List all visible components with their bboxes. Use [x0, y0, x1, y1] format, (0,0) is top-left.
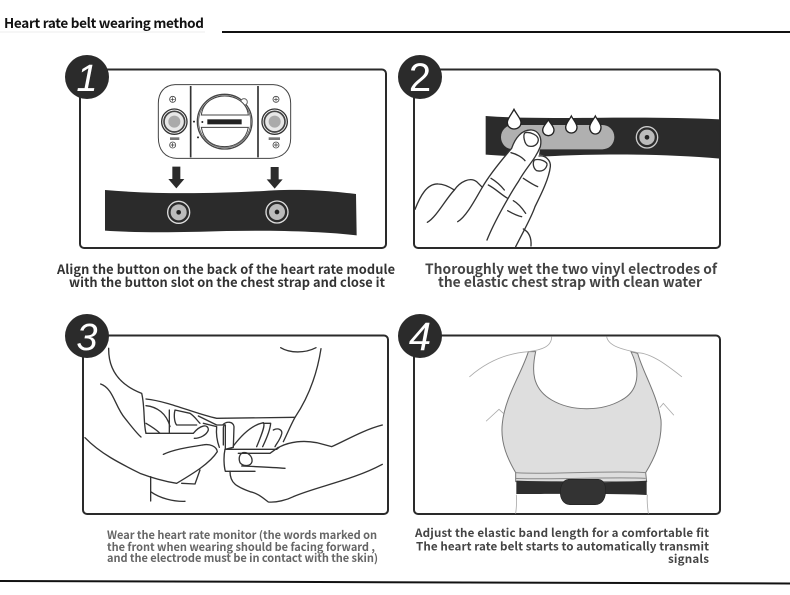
chest strap	[516, 481, 647, 495]
arrow: left down	[168, 167, 184, 188]
icon: hand with fingers	[415, 130, 550, 247]
illustration: torso with chest strap	[470, 337, 682, 513]
chest strap with two snap buttons	[105, 190, 357, 235]
caption: step 4: signals	[668, 551, 709, 567]
title: Heart rate belt wearing method	[4, 12, 204, 32]
step badge 3: 3	[76, 317, 98, 359]
caption: step 4	[414, 525, 709, 567]
icon: water drops	[507, 109, 601, 136]
step badge 3	[65, 314, 109, 359]
caption: step 4: Adjust the elastic band length for a comfortable fit	[414, 525, 709, 541]
step badge 2	[398, 55, 442, 100]
chest strap with electrode	[486, 116, 720, 159]
caption: step 1	[56, 259, 395, 291]
caption: step 1: with the button slot on the chest strap and close it	[69, 272, 386, 291]
caption: step 2: Thoroughly wet the two vinyl electrodes of	[425, 258, 718, 278]
caption: step 2: the elastic chest strap with clean water	[438, 271, 703, 291]
caption: step 3	[107, 527, 378, 566]
panel: step 2 wet electrodes	[398, 55, 720, 248]
caption: step 3: the front when wearing should be facing forward ,	[107, 539, 375, 555]
caption: step 3: and the electrode must be in contact with the skin)	[107, 550, 378, 566]
step badge 2: 2	[409, 56, 431, 100]
icon: heart rate module back	[158, 85, 291, 158]
step badge 4: 4	[409, 315, 431, 359]
caption: step 2	[425, 258, 718, 291]
panel: step 1 attach module	[65, 55, 386, 248]
arrow: right down	[267, 167, 283, 189]
step badge 1	[65, 55, 109, 100]
caption: step 1: Align the button on the back of the heart rate module	[56, 259, 395, 278]
caption: step 4: The heart rate belt starts to automatically transmit	[416, 538, 709, 554]
heart rate module	[560, 479, 606, 505]
step badge 1: 1	[76, 58, 98, 100]
illustration: hands fastening strap	[85, 348, 382, 502]
step badge 4	[398, 314, 442, 359]
panel: step 3 wear the monitor	[65, 314, 388, 514]
panel: step 4 adjust band	[398, 314, 720, 514]
caption: step 3: Wear the heart rate monitor (the words marked on	[107, 527, 377, 543]
